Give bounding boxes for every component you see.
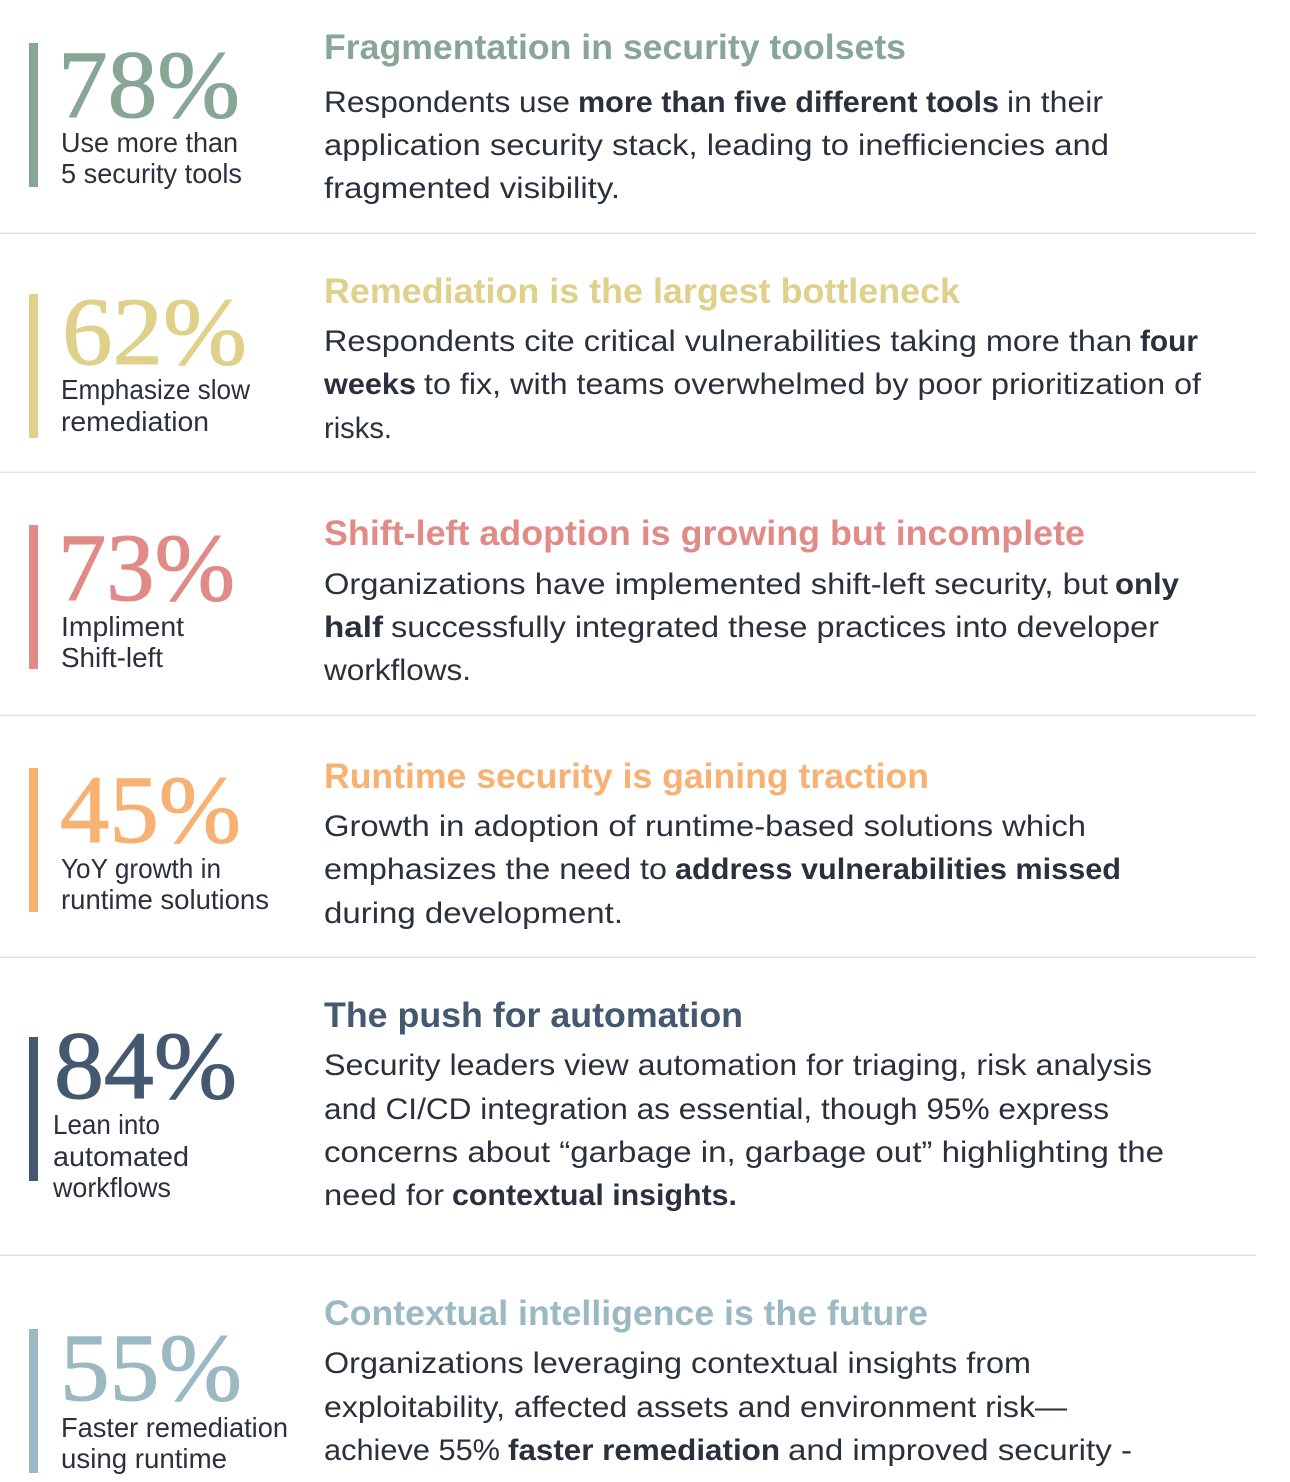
stat label: yoy growth in runtime solutions [61,853,269,915]
body text: runtime: emphasizes the need to [324,853,667,886]
body text: runtime [324,810,1121,930]
body text: remediation: to fix, with teams overwhelmed by poor prioritization of [424,368,1202,401]
body text: shift-left: successfully integrated these practices into developer [391,611,1159,644]
stat label: lean into automated workflows: automated [53,1141,189,1172]
body text: contextual intelligence: exploitability, affected assets and environment risk— [324,1391,1067,1424]
body text: shift-left: Organizations have implemented shift-left security, but [324,568,1109,601]
body text: remediation: Respondents cite critical vulnerabilities taking more than [324,325,1132,358]
stat label: faster remediation using runtime [61,1412,288,1474]
body text: automation: need for [324,1179,444,1212]
body text: fragmentation [324,86,1109,205]
stat: 73%: 73% [58,514,235,621]
stat label: faster remediation using runtime: Faster remediation [61,1412,288,1443]
stat label: emphasize slow remediation: remediation [61,406,209,437]
body text: fragmentation: application security stack, leading to inefficiencies and [324,129,1109,162]
panel: push for automation [29,996,1164,1212]
stat label: yoy growth in runtime solutions: YoY growth in [61,853,221,884]
accent bar: 55% [29,1329,38,1473]
accent bar: 78% [29,43,38,187]
stat label: use more than 5 security tools: Use more than [61,127,238,158]
accent bar: 45% [29,768,38,912]
heading: automation: The push for automation [324,996,743,1035]
heading: fragmentation: Fragmentation in security toolsets [324,28,906,67]
heading: remediation: Remediation is the largest bottleneck [324,272,961,311]
body text: shift-left: workflows. [323,654,471,687]
body text: fragmentation: fragmented visibility. [324,172,620,205]
stat label: impliment shift-left: Impliment [61,611,184,642]
stat: 45%: 45% [60,756,241,863]
body text: contextual intelligence: Organizations leveraging contextual insights from [324,1347,1031,1380]
body text: automation: concerns about “garbage in, garbage out” highlighting the [324,1136,1164,1169]
panel: runtime security [29,756,1121,930]
body text: automation [324,1049,1164,1212]
body text: automation: contextual insights. [452,1179,737,1212]
body text: remediation: risks. [324,412,392,445]
body text: runtime: during development. [324,897,623,930]
stat label: lean into automated workflows: workflows [52,1172,171,1203]
stat label: use more than 5 security tools [61,127,242,189]
stat label: impliment shift-left: Shift-left [61,642,163,673]
body text: runtime: address vulnerabilities missed [675,853,1121,886]
panel: shift-left adoption [29,514,1179,687]
heading: shift-left: Shift-left adoption is growing but incomplete [324,514,1085,553]
stat label: lean into automated workflows [52,1109,189,1203]
body text: contextual intelligence: achieve 55% [324,1434,500,1467]
body text: remediation: weeks [323,368,416,401]
body text: runtime: Growth in adoption of runtime-based solutions which [324,810,1086,843]
accent bar: 73% [29,525,38,669]
stat label: emphasize slow remediation [61,374,251,437]
body text: shift-left [323,568,1179,687]
accent bar: 84% [29,1037,38,1181]
panel: fragmentation in security toolsets [29,28,1109,205]
stat label: lean into automated workflows: Lean into [53,1109,160,1140]
body text: fragmentation: more than five different tools [578,86,999,119]
body text: fragmentation: Respondents use [324,86,570,119]
panel: contextual intelligence [29,1294,1132,1474]
stat: 78%: 78% [58,31,240,138]
stat label: yoy growth in runtime solutions: runtime solutions [61,884,269,915]
body text: contextual intelligence: and improved security - [788,1434,1132,1467]
body text: contextual intelligence: faster remediation [508,1434,780,1467]
heading: contextual intelligence: Contextual intelligence is the future [324,1294,928,1333]
body text: remediation: four [1140,325,1198,358]
body text: automation: and CI/CD integration as essential, though 95% express [324,1093,1109,1126]
stat: 84%: 84% [54,1012,237,1119]
accent bar: 62% [29,294,38,438]
panel: remediation bottleneck [29,272,1202,445]
body text: shift-left: only [1115,568,1179,601]
body text: shift-left: half [324,611,384,644]
stat label: faster remediation using runtime: using runtime [61,1443,227,1474]
stat label: emphasize slow remediation: Emphasize slow [61,374,251,405]
heading: runtime: Runtime security is gaining traction [324,757,929,796]
stat: 62%: 62% [62,278,247,385]
body text: remediation [323,325,1202,445]
stat label: impliment shift-left [61,611,184,673]
body text: fragmentation: in their [1007,86,1103,119]
body text: contextual intelligence [324,1347,1132,1467]
stat: 55%: 55% [60,1314,242,1421]
stat label: use more than 5 security tools: 5 security tools [61,158,242,189]
body text: automation: Security leaders view automation for triaging, risk analysis [324,1049,1152,1082]
